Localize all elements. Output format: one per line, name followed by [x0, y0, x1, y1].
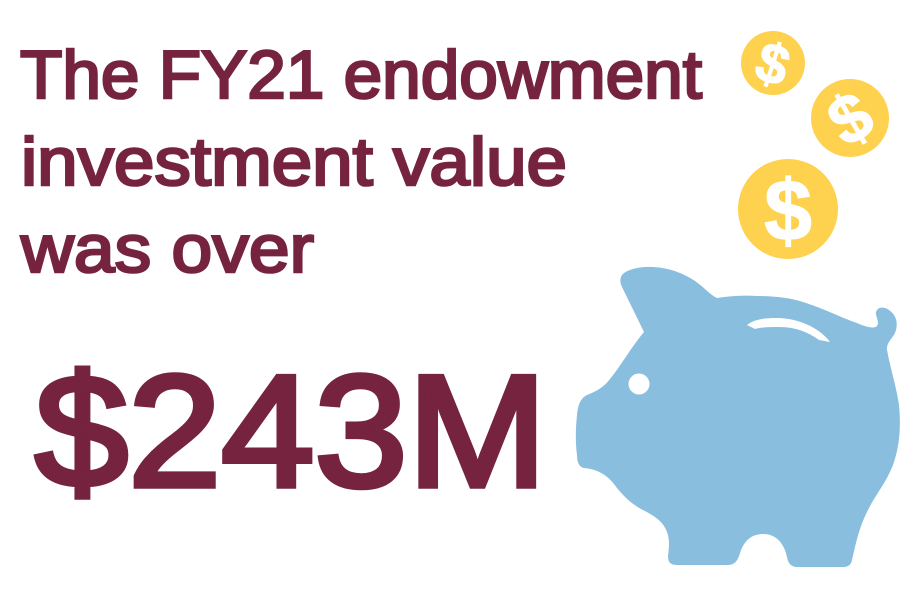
icon: coin right: $ — [815, 77, 886, 161]
heading: The FY21 endowment — [20, 37, 702, 113]
icon: coin large — [738, 159, 838, 259]
heading: was over — [20, 211, 314, 287]
icon: piggy bank — [576, 267, 900, 567]
icon: coin top left: $ — [748, 29, 797, 98]
heading — [20, 37, 702, 287]
big number: $243M: $243M — [35, 342, 547, 520]
pig: eye — [628, 374, 650, 394]
pig: coin slot — [747, 318, 830, 342]
heading: investment value — [21, 124, 567, 200]
icon: coin large: $ — [764, 163, 812, 259]
